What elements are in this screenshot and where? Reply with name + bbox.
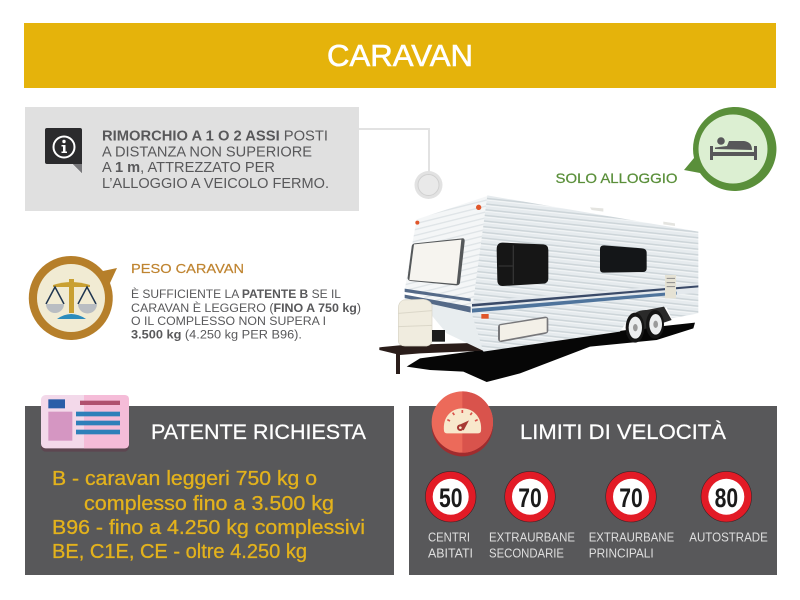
caravan illustration (379, 195, 698, 382)
speed sign: 70 extraurbane principali: EXTRAURBANE (589, 530, 674, 544)
icon: scales badge (29, 256, 117, 340)
icon: speedometer (432, 391, 493, 456)
speed sign: 70 extraurbane secondarie (489, 471, 575, 560)
text block: peso caravan: CARAVAN È LEGGERO (FINO A 750 kg) (131, 300, 361, 315)
licence list (52, 468, 365, 563)
speed sign: 80 autostrade (689, 471, 768, 544)
panel: limiti di velocità (409, 391, 777, 575)
speed sign: 70 extraurbane principali: 70 (619, 483, 643, 513)
speed sign: 50 centri abitati: ABITATI (428, 546, 473, 560)
text block: peso caravan: O IL COMPLESSO NON SUPERA I (131, 314, 326, 328)
heading: limiti di velocità: LIMITI DI VELOCITÀ (520, 419, 727, 444)
connector line from info panel to caravan (359, 129, 442, 199)
definition text: L’ALLOGGIO A VEICOLO FERMO. (102, 176, 329, 192)
definition text: RIMORCHIO A 1 O 2 ASSI POSTI (102, 128, 328, 144)
speed sign: 70 extraurbane principali (589, 471, 674, 560)
icon: info bubble (45, 128, 82, 173)
speed sign: 50 centri abitati: 50 (439, 483, 462, 513)
definition text: A DISTANZA NON SUPERIORE (102, 144, 312, 160)
definition text: A 1 m, ATTREZZATO PER (102, 160, 275, 176)
text block: peso caravan: 3.500 kg (4.250 kg PER B96). (131, 328, 302, 342)
speed sign: 50 centri abitati: CENTRI (428, 530, 470, 544)
licence list: BE, C1E, CE - oltre 4.250 kg (52, 541, 307, 563)
speed sign: 80 autostrade: AUTOSTRADE (689, 530, 768, 544)
licence list: B96 - fino a 4.250 kg complessivi (52, 517, 365, 539)
speed sign: 70 extraurbane secondarie: 70 (518, 483, 542, 513)
panel: patente richiesta (25, 395, 394, 575)
title banner (24, 23, 776, 88)
icon: licence card (41, 395, 129, 452)
licence list: complesso fino a 3.500 kg (84, 493, 334, 515)
speed sign: 50 centri abitati (425, 471, 476, 560)
speed sign: 80 autostrade: 80 (715, 483, 738, 513)
text block: peso caravan (131, 261, 361, 342)
text block: peso caravan: È SUFFICIENTE LA PATENTE B SE IL (131, 286, 341, 301)
label: solo alloggio: SOLO ALLOGGIO (556, 170, 678, 186)
heading: patente richiesta: PATENTE RICHIESTA (151, 420, 367, 444)
text block: peso caravan: PESO CARAVAN (131, 261, 244, 276)
speed sign: 70 extraurbane secondarie: SECONDARIE (489, 546, 564, 560)
panel: caravan definition (25, 107, 359, 211)
icon: bed badge (684, 107, 776, 191)
title banner: CARAVAN (327, 38, 473, 73)
speed sign: 70 extraurbane principali: PRINCIPALI (589, 546, 654, 560)
speed sign: 70 extraurbane secondarie: EXTRAURBANE (489, 530, 575, 544)
licence list: B - caravan leggeri 750 kg o (52, 468, 317, 490)
definition text (102, 128, 329, 192)
